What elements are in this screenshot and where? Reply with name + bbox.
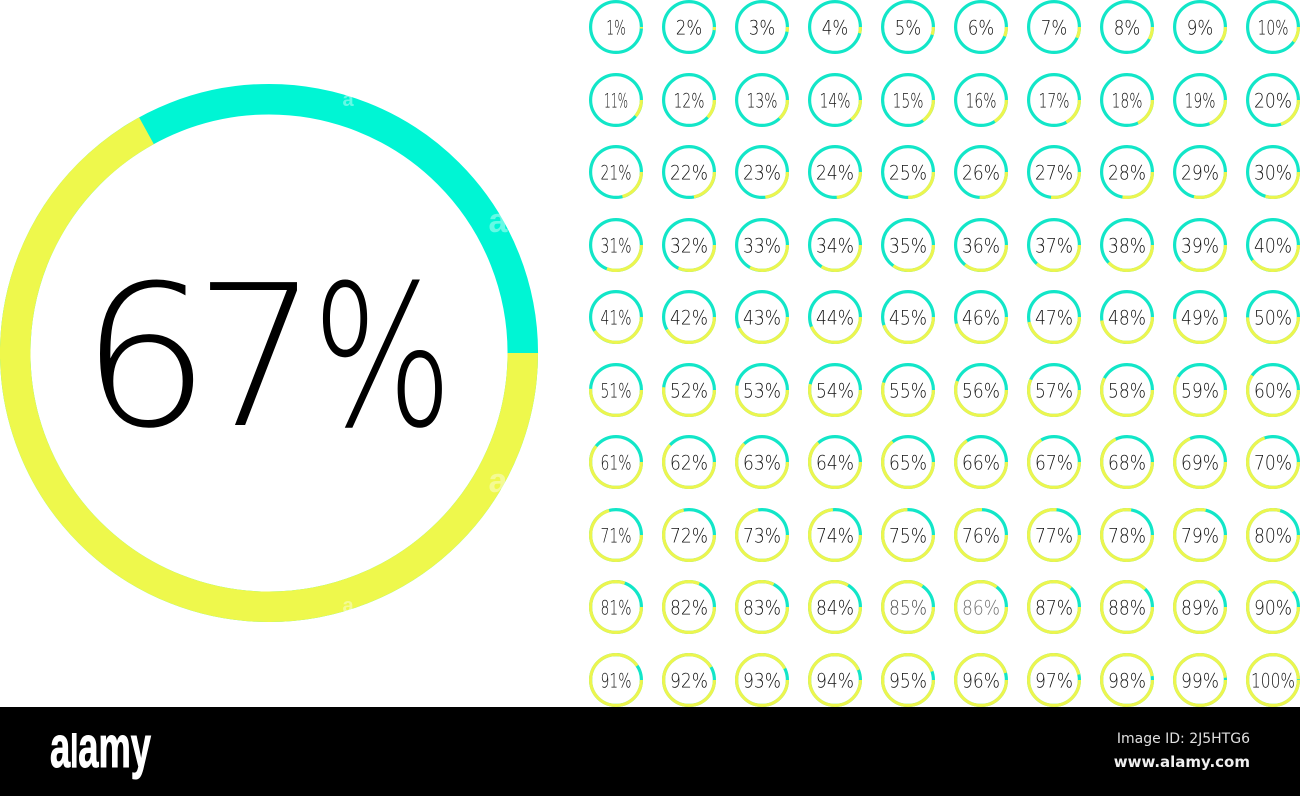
- gauge 8%: 8%: [1114, 16, 1140, 39]
- footer bar: [0, 707, 1300, 796]
- gauge 87%: [1029, 582, 1079, 632]
- gauge 53%: [737, 365, 787, 415]
- gauge 92%: [664, 655, 714, 705]
- gauge 26%: [956, 147, 1006, 197]
- footer url: www.alamy.com: [1114, 753, 1250, 771]
- gauge 67%: 67%: [1035, 451, 1073, 474]
- gauge 89%: 89%: [1181, 596, 1219, 619]
- gauge 41%: 41%: [600, 306, 632, 329]
- gauge 66%: [956, 437, 1006, 487]
- gauge 21%: [591, 147, 641, 197]
- gauge 36%: 36%: [962, 234, 1000, 257]
- gauge 41%: [591, 292, 641, 342]
- gauge 29%: 29%: [1181, 161, 1219, 184]
- gauge 43%: 43%: [743, 306, 781, 329]
- gauge 32%: 32%: [670, 234, 708, 257]
- gauge 90%: [1248, 582, 1298, 632]
- gauge 19%: [1175, 75, 1225, 125]
- gauge 28%: [1102, 147, 1152, 197]
- gauge 23%: [737, 147, 787, 197]
- gauge 59%: 59%: [1181, 379, 1219, 402]
- gauge 80%: [1248, 510, 1298, 560]
- gauge 38%: 38%: [1108, 234, 1146, 257]
- gauge 67%: [1029, 437, 1079, 487]
- gauge 54%: [810, 365, 860, 415]
- gauge 22%: [664, 147, 714, 197]
- gauge 25%: 25%: [889, 161, 927, 184]
- gauge 70%: [1248, 437, 1298, 487]
- large gauge: 67%: [15, 89, 523, 617]
- gauge 27%: 27%: [1035, 161, 1073, 184]
- gauge 24%: [810, 147, 860, 197]
- gauge 98%: 98%: [1108, 669, 1146, 692]
- gauge 65%: 65%: [889, 451, 927, 474]
- gauge 5%: 5%: [895, 16, 921, 39]
- gauge 33%: [737, 220, 787, 270]
- gauge 93%: [737, 655, 787, 705]
- gauge 17%: [1029, 75, 1079, 125]
- gauge 100%: [1248, 655, 1298, 705]
- gauge 92%: 92%: [670, 669, 708, 692]
- gauge 78%: [1102, 510, 1152, 560]
- gauge 93%: 93%: [743, 669, 781, 692]
- gauge 9%: [1175, 2, 1225, 52]
- gauge 99%: 99%: [1181, 669, 1219, 692]
- gauge 91%: 91%: [600, 669, 632, 692]
- gauge 17%: 17%: [1038, 89, 1070, 112]
- gauge 95%: [883, 655, 933, 705]
- gauge 85%: [883, 582, 933, 632]
- gauge 34%: [810, 220, 860, 270]
- gauge 16%: [956, 75, 1006, 125]
- gauge 86%: 86%: [962, 596, 1000, 619]
- gauge 69%: 69%: [1181, 451, 1219, 474]
- gauge 44%: [810, 292, 860, 342]
- gauge 78%: 78%: [1108, 524, 1146, 547]
- gauge 58%: 58%: [1108, 379, 1146, 402]
- large gauge: 67%: a: [342, 595, 354, 617]
- gauge 61%: 61%: [600, 451, 632, 474]
- gauge 71%: [591, 510, 641, 560]
- gauge 89%: [1175, 582, 1225, 632]
- gauge 79%: [1175, 510, 1225, 560]
- gauge 7%: [1029, 2, 1079, 52]
- gauge 66%: 66%: [962, 451, 1000, 474]
- gauge 72%: 72%: [670, 524, 708, 547]
- gauge 90%: 90%: [1254, 596, 1292, 619]
- gauge 31%: 31%: [600, 234, 632, 257]
- gauge 39%: [1175, 220, 1225, 270]
- gauge 60%: [1248, 365, 1298, 415]
- gauge 84%: 84%: [816, 596, 854, 619]
- gauge 37%: 37%: [1035, 234, 1073, 257]
- gauge 94%: [810, 655, 860, 705]
- gauge 34%: 34%: [816, 234, 854, 257]
- gauge 9%: 9%: [1187, 16, 1213, 39]
- gauge 72%: [664, 510, 714, 560]
- gauge 35%: 35%: [889, 234, 927, 257]
- gauge 46%: [956, 292, 1006, 342]
- gauge 88%: [1102, 582, 1152, 632]
- gauge 42%: [664, 292, 714, 342]
- gauge 53%: 53%: [743, 379, 781, 402]
- gauge 22%: 22%: [670, 161, 708, 184]
- gauge 4%: 4%: [822, 16, 848, 39]
- gauge 51%: [591, 365, 641, 415]
- gauge 48%: [1102, 292, 1152, 342]
- gauge 77%: [1029, 510, 1079, 560]
- gauge 64%: 64%: [816, 451, 854, 474]
- gauge 63%: 63%: [743, 451, 781, 474]
- gauge 74%: 74%: [816, 524, 854, 547]
- gauge 85%: 85%: [889, 596, 927, 619]
- gauge 37%: [1029, 220, 1079, 270]
- gauge 11%: 11%: [604, 89, 628, 112]
- gauge 62%: 62%: [670, 451, 708, 474]
- gauge 83%: [737, 582, 787, 632]
- gauge 91%: [591, 655, 641, 705]
- gauge 94%: 94%: [816, 669, 854, 692]
- gauge 65%: [883, 437, 933, 487]
- footer logo: alamy: alamy: [50, 715, 151, 780]
- gauge 84%: [810, 582, 860, 632]
- gauge 24%: 24%: [816, 161, 854, 184]
- gauge 47%: [1029, 292, 1079, 342]
- gauge 70%: 70%: [1254, 451, 1292, 474]
- gauge 19%: 19%: [1184, 89, 1216, 112]
- gauge 7%: 7%: [1041, 16, 1067, 39]
- gauge 20%: 20%: [1254, 89, 1292, 112]
- large gauge: 67%: a: [489, 462, 509, 500]
- gauge 86%: [956, 582, 1006, 632]
- gauge 45%: [883, 292, 933, 342]
- gauge 23%: 23%: [743, 161, 781, 184]
- gauge 73%: [737, 510, 787, 560]
- gauge 82%: [664, 582, 714, 632]
- gauge 32%: [664, 220, 714, 270]
- gauge 76%: [956, 510, 1006, 560]
- gauge 47%: 47%: [1035, 306, 1073, 329]
- footer image id: Image ID: 2J5HTG6: [1117, 731, 1250, 747]
- gauge 13%: 13%: [746, 89, 778, 112]
- gauge 50%: 50%: [1254, 306, 1292, 329]
- gauge 2%: 2%: [676, 16, 702, 39]
- gauge 75%: [883, 510, 933, 560]
- gauge 62%: [664, 437, 714, 487]
- large gauge: 67%: 7: [194, 244, 319, 472]
- gauge 81%: 81%: [600, 596, 632, 619]
- gauge 57%: [1029, 365, 1079, 415]
- large gauge: 67%: a: [489, 202, 509, 240]
- gauge 40%: [1248, 220, 1298, 270]
- gauge 27%: [1029, 147, 1079, 197]
- gauge 83%: 83%: [743, 596, 781, 619]
- gauge 35%: [883, 220, 933, 270]
- gauge 81%: [591, 582, 641, 632]
- gauge 96%: 96%: [962, 669, 1000, 692]
- gauge 97%: 97%: [1035, 669, 1073, 692]
- gauge 87%: 87%: [1035, 596, 1073, 619]
- gauge 55%: [883, 365, 933, 415]
- gauge 98%: [1102, 655, 1152, 705]
- gauge 18%: 18%: [1112, 89, 1142, 112]
- gauge 18%: [1102, 75, 1152, 125]
- gauge 1%: 1%: [606, 16, 626, 39]
- gauge 50%: [1248, 292, 1298, 342]
- gauge 33%: 33%: [743, 234, 781, 257]
- gauge 43%: [737, 292, 787, 342]
- gauge 75%: 75%: [889, 524, 927, 547]
- gauge 56%: [956, 365, 1006, 415]
- gauge 15%: [883, 75, 933, 125]
- gauge 68%: 68%: [1108, 451, 1146, 474]
- gauge 30%: [1248, 147, 1298, 197]
- gauge 6%: [956, 2, 1006, 52]
- gauge 36%: [956, 220, 1006, 270]
- gauge 13%: [737, 75, 787, 125]
- gauge 64%: [810, 437, 860, 487]
- gauge 54%: 54%: [816, 379, 854, 402]
- gauge 12%: [664, 75, 714, 125]
- gauge 45%: 45%: [889, 306, 927, 329]
- gauge 69%: [1175, 437, 1225, 487]
- gauge 95%: 95%: [889, 669, 927, 692]
- gauge 59%: [1175, 365, 1225, 415]
- gauge 39%: 39%: [1181, 234, 1219, 257]
- gauge 5%: [883, 2, 933, 52]
- gauge 40%: 40%: [1254, 234, 1292, 257]
- gauge 74%: [810, 510, 860, 560]
- gauge 99%: [1175, 655, 1225, 705]
- gauge 44%: 44%: [816, 306, 854, 329]
- gauge 80%: 80%: [1254, 524, 1292, 547]
- gauge 49%: [1175, 292, 1225, 342]
- gauge 79%: 79%: [1181, 524, 1219, 547]
- gauge 60%: 60%: [1254, 379, 1292, 402]
- large gauge: 67%: 6: [80, 244, 211, 472]
- gauge 71%: 71%: [600, 524, 632, 547]
- gauge 21%: 21%: [600, 161, 632, 184]
- gauge 52%: [664, 365, 714, 415]
- gauge 82%: 82%: [670, 596, 708, 619]
- gauge 42%: 42%: [670, 306, 708, 329]
- gauge 96%: [956, 655, 1006, 705]
- gauge 14%: [810, 75, 860, 125]
- gauge 48%: 48%: [1108, 306, 1146, 329]
- gauge 3%: 3%: [749, 16, 775, 39]
- gauge 11%: [591, 75, 641, 125]
- large gauge: 67%: a: [342, 89, 354, 111]
- gauge 57%: 57%: [1035, 379, 1073, 402]
- gauge 15%: 15%: [892, 89, 924, 112]
- gauge 25%: [883, 147, 933, 197]
- gauge 61%: [591, 437, 641, 487]
- gauge grid: 1% to 100%: [591, 2, 1298, 705]
- gauge 52%: 52%: [670, 379, 708, 402]
- gauge 26%: 26%: [962, 161, 1000, 184]
- gauge 49%: 49%: [1181, 306, 1219, 329]
- gauge 38%: [1102, 220, 1152, 270]
- gauge 1%: [591, 2, 641, 52]
- gauge 73%: 73%: [743, 524, 781, 547]
- gauge 88%: 88%: [1108, 596, 1146, 619]
- gauge 2%: [664, 2, 714, 52]
- gauge 6%: 6%: [968, 16, 994, 39]
- gauge 10%: 10%: [1258, 16, 1288, 39]
- gauge 3%: [737, 2, 787, 52]
- gauge 14%: 14%: [820, 89, 850, 112]
- large gauge: 67%: %: [312, 244, 453, 472]
- gauge 63%: [737, 437, 787, 487]
- gauge 20%: [1248, 75, 1298, 125]
- gauge 4%: [810, 2, 860, 52]
- gauge 58%: [1102, 365, 1152, 415]
- gauge 31%: [591, 220, 641, 270]
- gauge 51%: 51%: [600, 379, 632, 402]
- gauge 46%: 46%: [962, 306, 1000, 329]
- gauge 29%: [1175, 147, 1225, 197]
- gauge 10%: [1248, 2, 1298, 52]
- gauge 30%: 30%: [1254, 161, 1292, 184]
- gauge 76%: 76%: [962, 524, 1000, 547]
- gauge 68%: [1102, 437, 1152, 487]
- gauge 28%: 28%: [1108, 161, 1146, 184]
- gauge 8%: [1102, 2, 1152, 52]
- gauge 77%: 77%: [1035, 524, 1073, 547]
- gauge 55%: 55%: [889, 379, 927, 402]
- gauge 97%: [1029, 655, 1079, 705]
- gauge 12%: 12%: [674, 89, 704, 112]
- gauge 56%: 56%: [962, 379, 1000, 402]
- gauge 16%: 16%: [966, 89, 996, 112]
